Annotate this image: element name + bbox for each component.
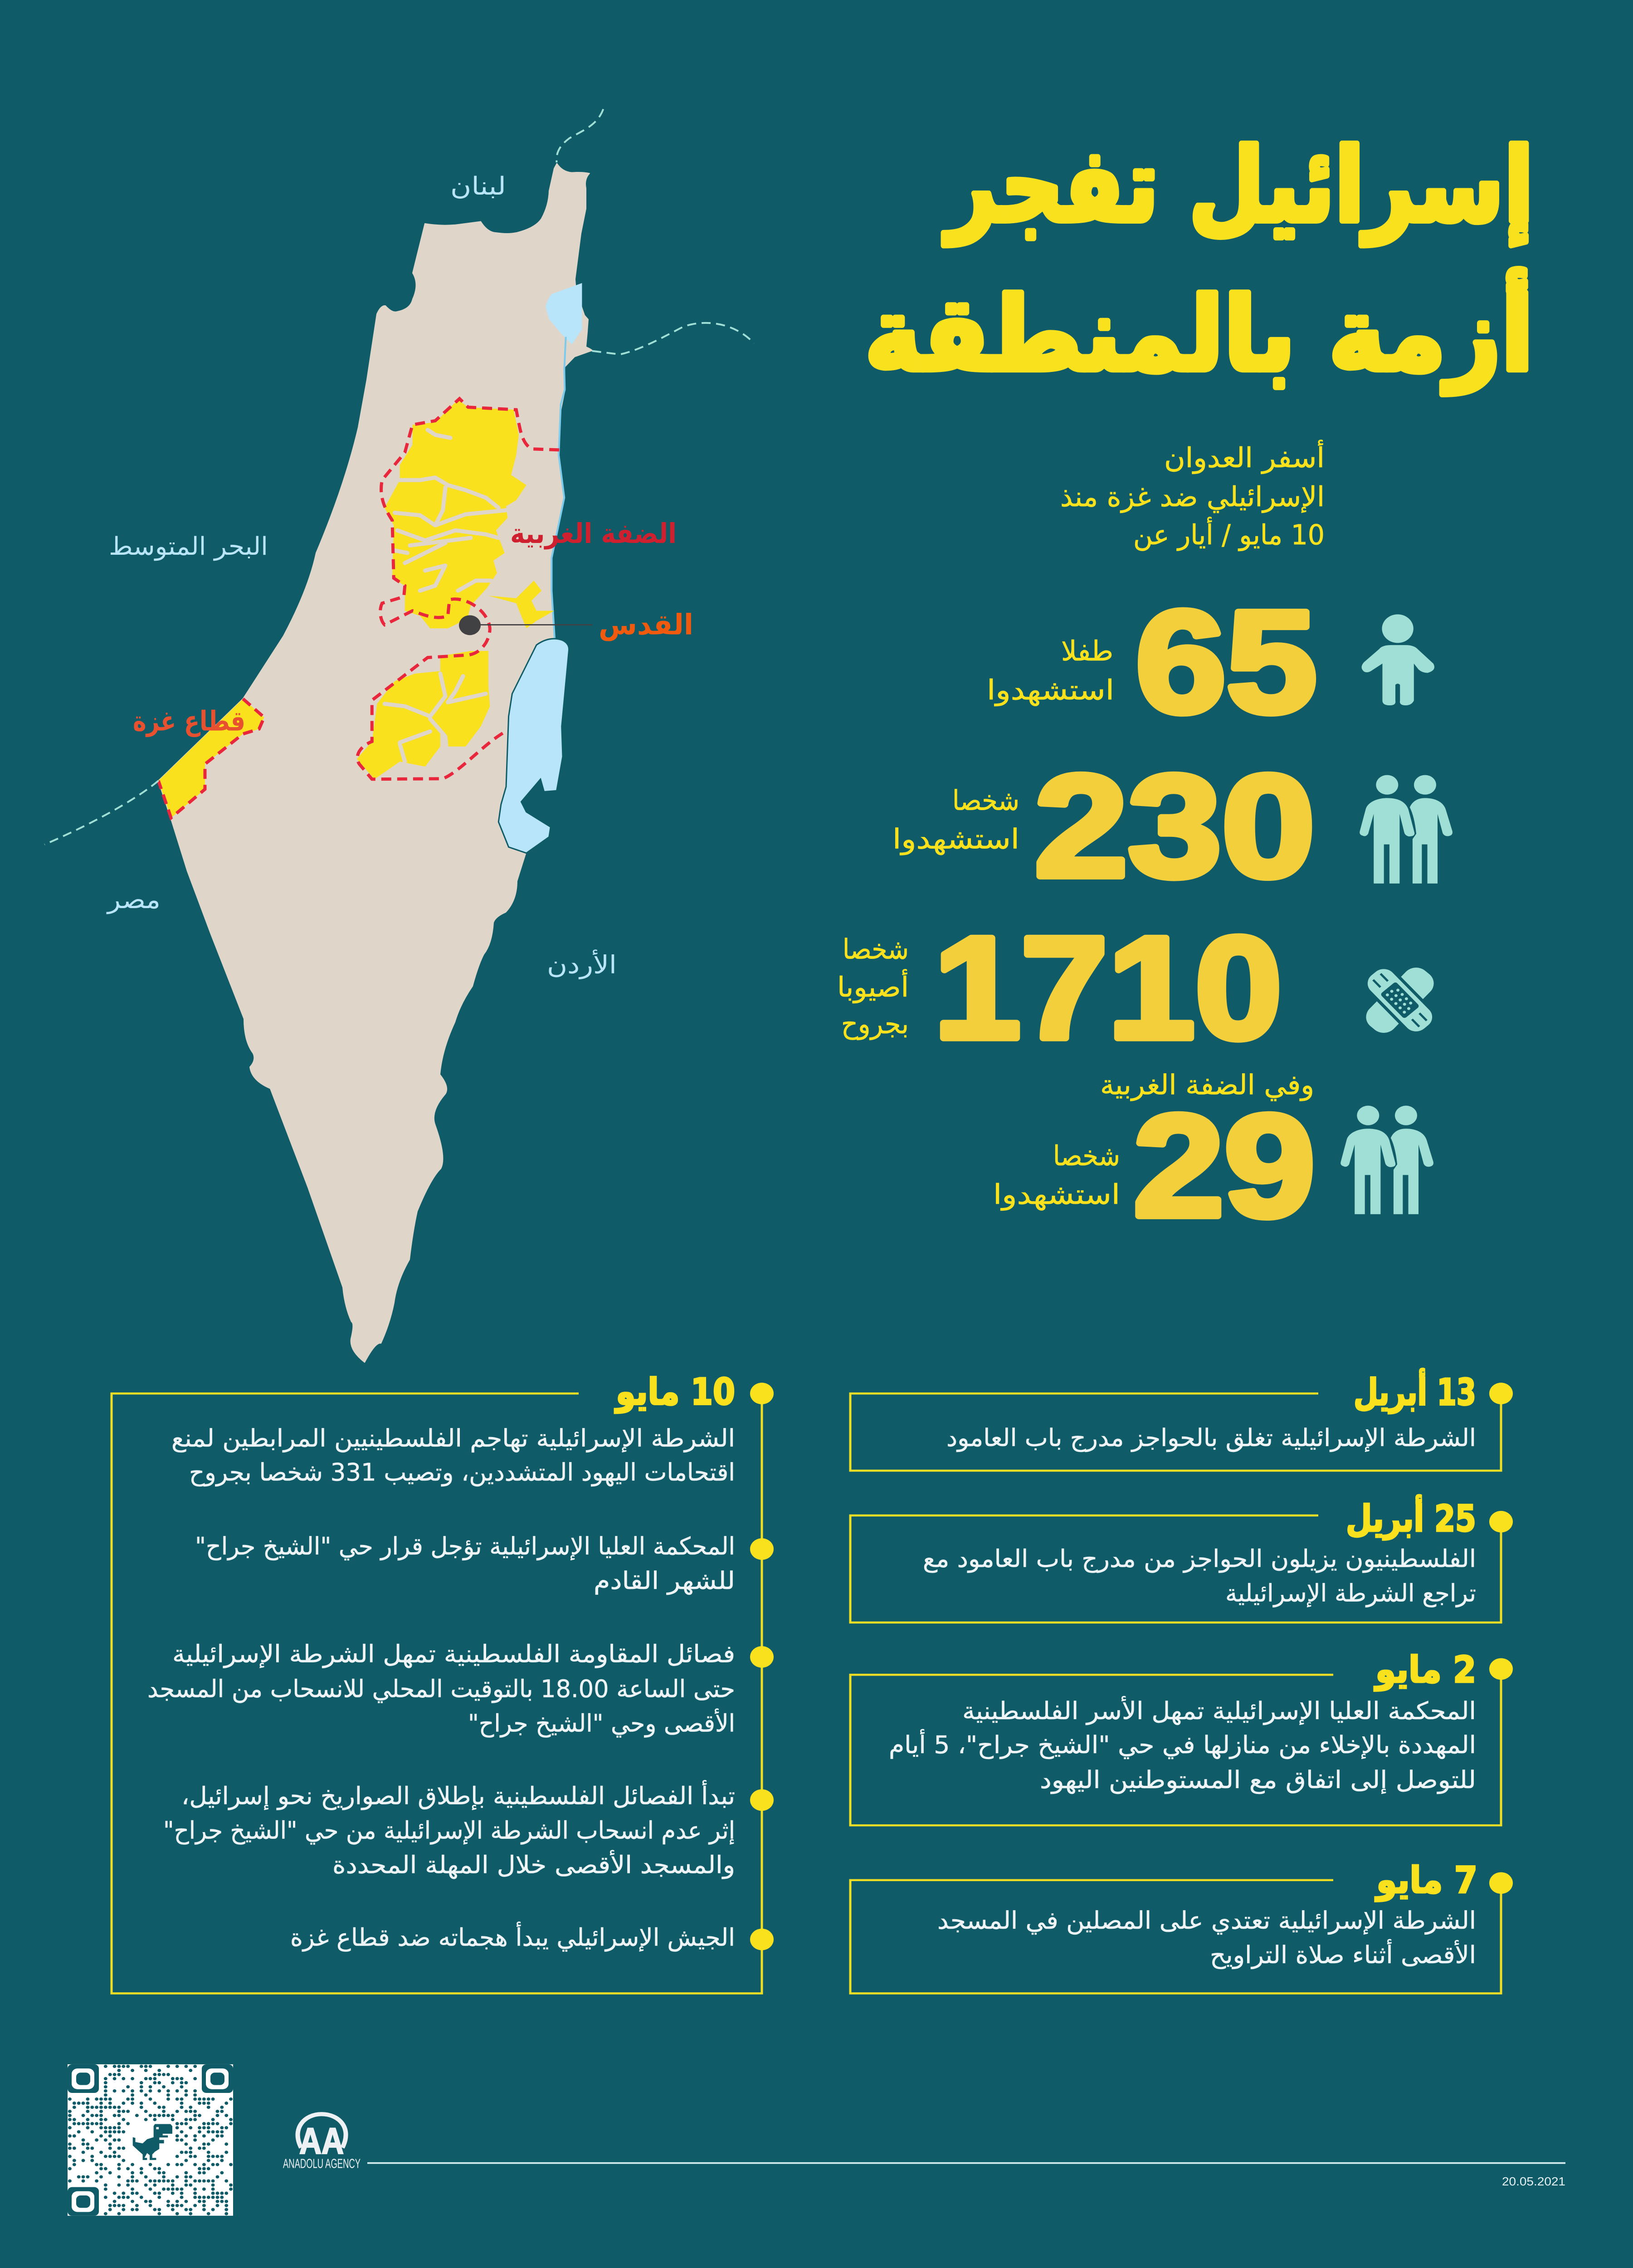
event text <box>171 1424 735 1486</box>
event text: الأقصى وحي "الشيخ جراح" <box>468 1709 735 1738</box>
event text: حتى الساعة 18.00 بالتوقيت المحلي للانسحاب من المسجد <box>147 1675 735 1703</box>
intro text: الإسرائيلي ضد غزة منذ <box>1060 480 1325 513</box>
event text: للتوصل إلى اتفاق مع المستوطنين اليهود <box>1040 1766 1476 1794</box>
title: أزمة بالمنطقة <box>865 269 1534 394</box>
event text: الفلسطينيون يزيلون الحواجز من مدرج باب العامود مع <box>923 1545 1476 1573</box>
number: 65 <box>1136 581 1317 743</box>
date: 2 مايو <box>1374 1648 1476 1691</box>
map labels: قطاع غزة <box>133 705 245 737</box>
icon: two adults <box>1360 775 1453 884</box>
Jerusalem marker <box>459 615 592 635</box>
Gaza dashed border <box>158 699 264 818</box>
number: 29 <box>1133 1085 1315 1247</box>
dots <box>750 1383 774 1950</box>
number: 1710 <box>934 907 1282 1069</box>
dot <box>1489 1872 1513 1894</box>
map of Palestine <box>44 109 754 1362</box>
label: شخصا <box>843 933 909 965</box>
label: أصيوبا <box>837 969 909 1003</box>
icon: bandage <box>1360 963 1439 1038</box>
event text: اقتحامات اليهود المتشددين، وتصيب 331 شخصا بجروح <box>189 1458 735 1486</box>
label <box>987 635 1114 706</box>
heading: West Bank: وفي الضفة الغربية <box>1100 1069 1314 1101</box>
stat: 1710 wounded <box>837 907 1439 1069</box>
logo: Anadolu Agency <box>283 2114 361 2171</box>
panel: 25 April <box>850 1495 1513 1623</box>
event text: للشهر القادم <box>594 1567 735 1595</box>
label: استشهدوا <box>993 1178 1120 1211</box>
finder pattern: top left <box>68 2064 99 2093</box>
date: 10 مايو <box>614 1370 735 1413</box>
panel: 13 April <box>850 1369 1513 1471</box>
number: 230 <box>1034 745 1315 907</box>
event text: الأقصى أثناء صلاة التراويح <box>1210 1939 1476 1969</box>
stat: 230 people <box>892 745 1453 907</box>
footer rule <box>367 2162 1565 2164</box>
border lines <box>44 109 754 845</box>
dot <box>1489 1511 1513 1532</box>
land outline <box>158 163 592 1362</box>
event text: إثر عدم انسحاب الشرطة الإسرائيلية من حي "الشيخ جراح" <box>163 1817 735 1845</box>
panel: 2 May <box>850 1648 1513 1825</box>
event text: الشرطة الإسرائيلية تهاجم الفلسطينيين المرابطين لمنع <box>171 1424 735 1452</box>
label: طفلا <box>1061 635 1113 667</box>
event text: المحكمة العليا الإسرائيلية تمهل الأسر الفلسطينية <box>962 1696 1476 1725</box>
date: 13 أبريل <box>1354 1369 1476 1414</box>
event text: تبدأ الفصائل الفلسطينية بإطلاق الصواريخ نحو إسرائيل، <box>181 1780 735 1810</box>
Dead Sea <box>498 639 569 853</box>
event text <box>163 1780 735 1879</box>
map labels <box>106 171 693 979</box>
map labels: مصر <box>106 885 161 914</box>
Jordan river <box>551 337 566 638</box>
map labels: البحر المتوسط <box>109 532 268 561</box>
map labels: لبنان <box>450 171 506 200</box>
event text: الجيش الإسرائيلي يبدأ هجماته ضد قطاع غزة <box>290 1921 735 1952</box>
event text <box>195 1532 735 1595</box>
date: 25 أبريل <box>1346 1495 1476 1540</box>
dot <box>1489 1658 1513 1680</box>
event text: الشرطة الإسرائيلية تعتدي على المصلين في المسجد <box>937 1906 1476 1935</box>
event text: المحكمة العليا الإسرائيلية تؤجل قرار حي "الشيخ جراح" <box>195 1532 735 1560</box>
label: استشهدوا <box>892 823 1019 855</box>
label <box>892 784 1019 855</box>
date: 20.05.2021 <box>1502 2175 1565 2188</box>
label: شخصا <box>952 784 1019 816</box>
logo: Anadolu Agency: ANADOLU AGENCY <box>283 2157 361 2171</box>
QR code <box>68 2064 233 2216</box>
event text <box>923 1545 1476 1608</box>
event text: تراجع الشرطة الإسرائيلية <box>1225 1579 1476 1608</box>
event text <box>147 1640 735 1738</box>
event text: والمسجد الأقصى خلال المهلة المحددة <box>332 1850 735 1879</box>
map labels: الضفة الغربية <box>510 518 677 549</box>
event text: فصائل المقاومة الفلسطينية تمهل الشرطة الإسرائيلية <box>172 1640 735 1668</box>
West Bank yellow areas <box>357 400 554 779</box>
stat: 65 children <box>987 581 1434 743</box>
map labels: القدس <box>599 609 693 641</box>
intro text: 10 مايو / أيار عن <box>1133 517 1325 551</box>
label: بجروح <box>841 1008 909 1040</box>
panel: 7 May <box>850 1859 1513 1994</box>
icon: two adults <box>1341 1106 1433 1214</box>
finder pattern: bottom left <box>68 2187 99 2216</box>
label: شخصا <box>1053 1140 1120 1172</box>
icon: child <box>1362 614 1434 705</box>
Lake Tiberias <box>546 283 582 344</box>
map labels: الأردن <box>547 949 617 979</box>
panel: 10 May timeline <box>112 1370 774 1994</box>
stat: West Bank 29 <box>993 1069 1433 1247</box>
event text <box>889 1696 1476 1794</box>
icon: dinosaur <box>133 2124 172 2160</box>
event text: الشرطة الإسرائيلية تغلق بالحواجز مدرج باب العامود <box>946 1424 1476 1452</box>
intro text: أسفر العدوان <box>1164 440 1325 474</box>
event text <box>937 1906 1476 1969</box>
label <box>837 933 909 1040</box>
date: 7 مايو <box>1375 1859 1477 1901</box>
title <box>865 127 1534 394</box>
intro text <box>1060 440 1325 551</box>
label: استشهدوا <box>987 674 1114 706</box>
event text: المهددة بالإخلاء من منازلها في حي "الشيخ جراح"، 5 أيام <box>889 1729 1476 1759</box>
label <box>993 1140 1120 1211</box>
West Bank dashed border <box>357 399 559 779</box>
finder pattern: top right <box>202 2064 233 2093</box>
logo: Anadolu Agency: AA <box>299 2121 344 2161</box>
Gaza Strip yellow area <box>158 699 264 818</box>
dot <box>1489 1383 1513 1404</box>
